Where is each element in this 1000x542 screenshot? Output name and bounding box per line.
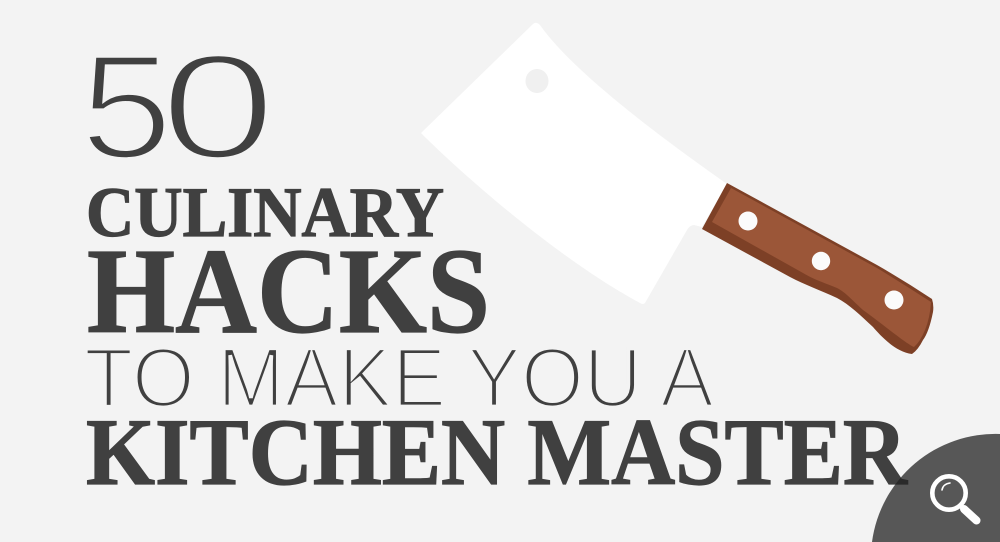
handle rivet 2 bbox=[812, 252, 830, 270]
title line: to make you a: TO MAKE YOU A bbox=[84, 330, 714, 424]
handle rivet 3 bbox=[884, 290, 904, 310]
title number: 50: 5 bbox=[80, 23, 173, 190]
handle face bbox=[712, 188, 931, 347]
title line: hacks: HACKS bbox=[87, 224, 490, 359]
icon: magnifying glass bbox=[932, 476, 976, 520]
cleaver blade bbox=[421, 23, 727, 304]
zoom button bbox=[872, 434, 1000, 542]
handle edge bbox=[702, 183, 933, 354]
title line: culinary: CULINARY bbox=[86, 174, 444, 252]
button background bbox=[872, 434, 1000, 542]
handle rivet 1 bbox=[738, 212, 758, 230]
title number: 50 bbox=[80, 23, 276, 190]
icon: meat cleaver bbox=[421, 23, 933, 354]
blade hole bbox=[526, 69, 548, 93]
title number: 50: 0 bbox=[160, 24, 276, 190]
title bbox=[80, 23, 908, 505]
title line: kitchen master: KITCHEN MASTER bbox=[86, 399, 908, 505]
